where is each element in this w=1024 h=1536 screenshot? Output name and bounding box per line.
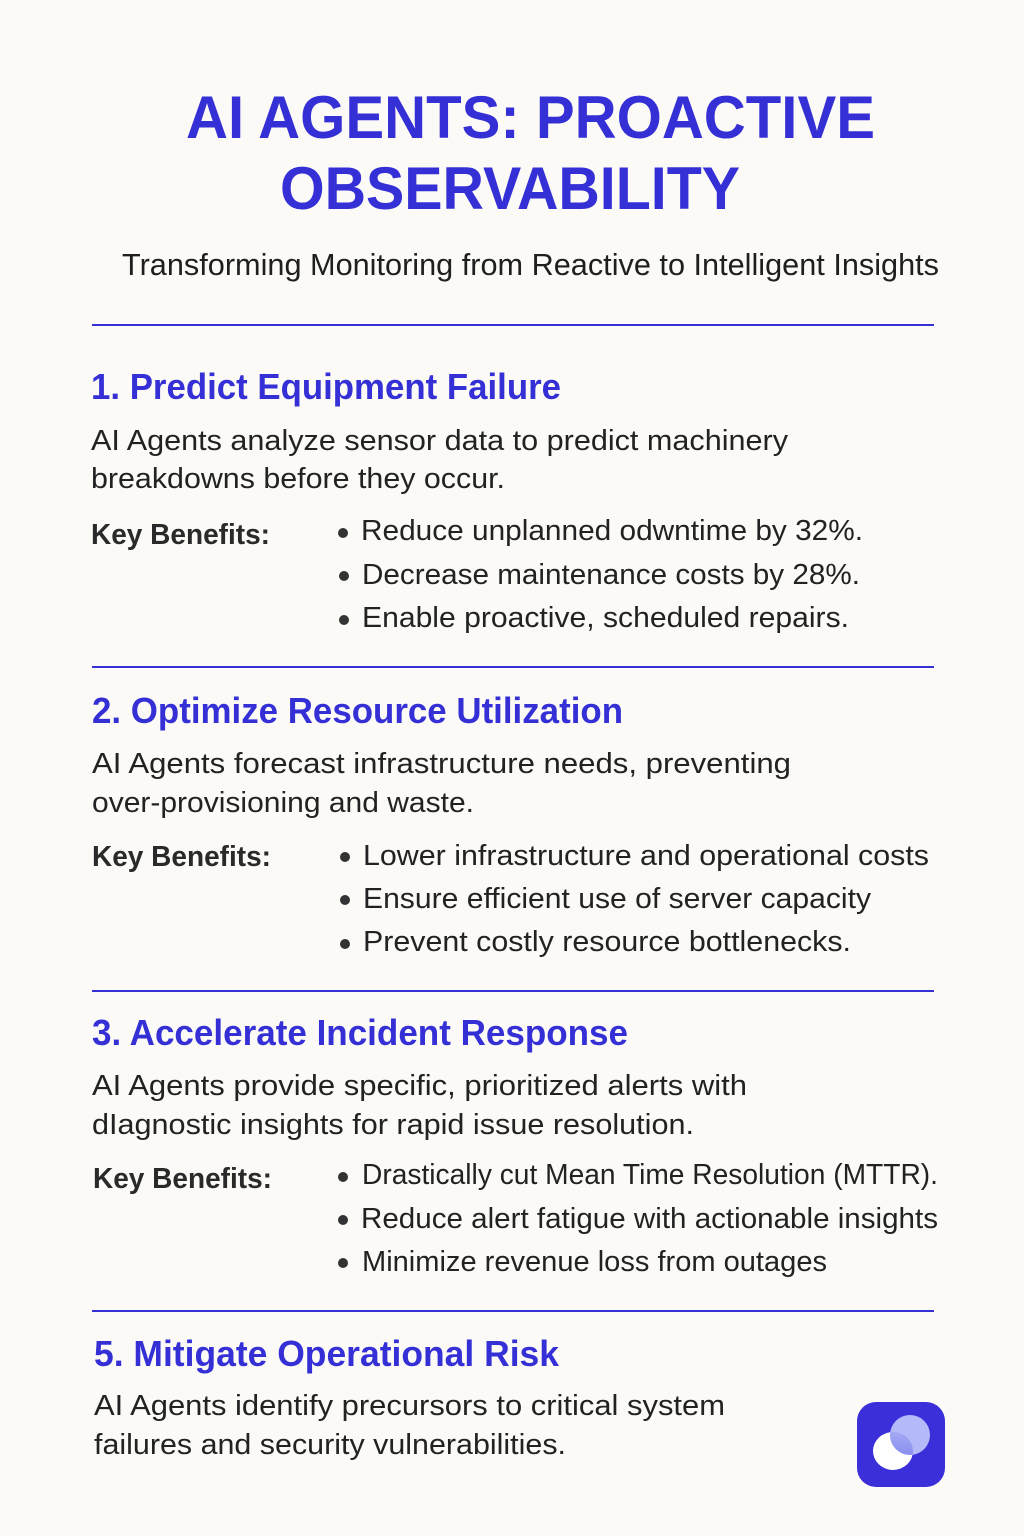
text block: section 1 description: AI Agents analyze sensor data to predict machinery	[91, 425, 789, 457]
text block: section 5 description: failures and security vulnerabilities.	[94, 1429, 566, 1461]
text block: section 5 description: AI Agents identify precursors to critical system	[94, 1390, 725, 1422]
label: key benefits: Key Benefits:	[92, 841, 271, 873]
text block: section 3 description: AI Agents provide specific, prioritized alerts with	[92, 1070, 747, 1102]
panel: section 3	[92, 1012, 938, 1278]
text block: section 2 description: over-provisioning and waste.	[92, 787, 474, 819]
list: section 1 benefits: Decrease maintenance costs by 28%.	[362, 559, 860, 591]
heading: predict equipment failure: 1. Predict Equipment Failure	[91, 366, 561, 407]
panel: section 1	[91, 366, 863, 634]
list: section 3 benefits: Minimize revenue loss from outages	[362, 1246, 827, 1278]
text block: section 5 description	[94, 1390, 725, 1461]
title: AI AGENTS: PROACTIVE	[186, 84, 875, 151]
heading: optimize resource utilization: 2. Optimize Resource Utilization	[92, 690, 623, 731]
text block: section 1 description: breakdowns before they occur.	[91, 463, 505, 495]
list: section 2 benefits	[340, 840, 929, 958]
label: key benefits: Key Benefits:	[93, 1163, 272, 1195]
list: section 2 benefits: Ensure efficient use of server capacity	[363, 883, 872, 915]
heading: mitigate operational risk: 5. Mitigate Operational Risk	[94, 1333, 560, 1374]
list: section 2 benefits: Prevent costly resource bottlenecks.	[363, 926, 851, 958]
panel: section 2	[92, 690, 929, 958]
text block: section 2 description: AI Agents forecast infrastructure needs, preventing	[92, 748, 791, 780]
list: section 3 benefits	[338, 1159, 938, 1278]
subtitle: Transforming Monitoring from Reactive to Intelligent Insights	[122, 247, 939, 282]
list: section 2 benefits: Lower infrastructure and operational costs	[363, 840, 929, 872]
list: section 1 benefits: Reduce unplanned odwntime by 32%.	[361, 515, 863, 547]
list: section 3 benefits: Drastically cut Mean Time Resolution (MTTR).	[362, 1159, 938, 1191]
label: key benefits: Key Benefits:	[91, 519, 270, 551]
list: section 1 benefits: Enable proactive, scheduled repairs.	[362, 602, 849, 634]
text block: section 3 description: dIagnostic insights for rapid issue resolution.	[92, 1109, 694, 1141]
heading: accelerate incident response: 3. Accelerate Incident Response	[92, 1012, 628, 1053]
text block: section 3 description	[92, 1070, 747, 1141]
panel: section 5	[94, 1333, 725, 1461]
title: OBSERVABILITY	[280, 155, 740, 222]
text block: section 1 description	[91, 425, 789, 495]
list: section 3 benefits: Reduce alert fatigue with actionable insights	[361, 1203, 938, 1235]
list: section 1 benefits	[338, 515, 863, 634]
icon: overlapping circles logo	[857, 1402, 945, 1487]
text block: section 2 description	[92, 748, 791, 819]
title	[186, 84, 875, 222]
